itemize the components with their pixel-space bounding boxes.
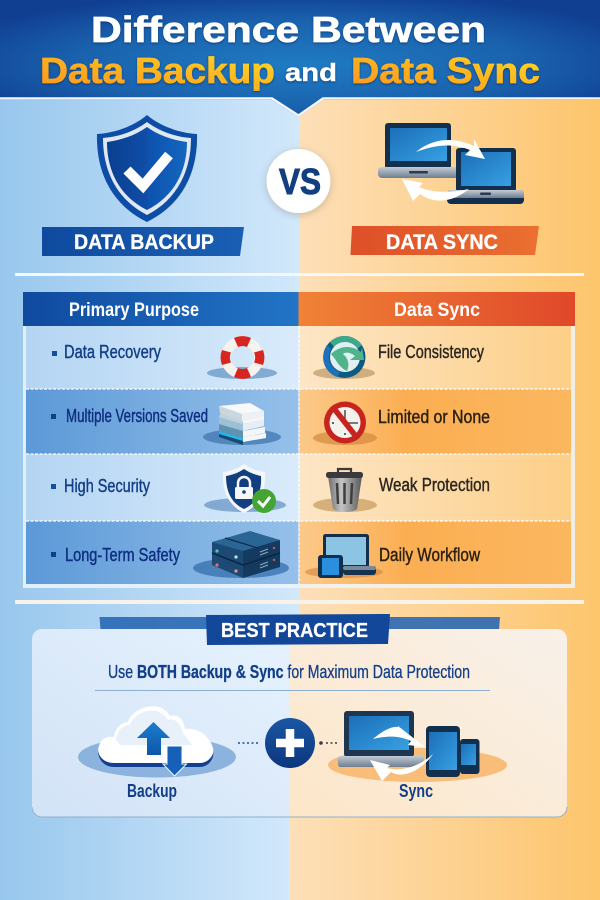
icon: two laptops syncing	[378, 123, 524, 204]
icon: shield lock with check	[204, 464, 286, 513]
row: Daily Workflow: Daily Workflow	[379, 545, 481, 565]
banner: Data Sync	[350, 226, 539, 255]
banner: Data Backup	[42, 227, 244, 256]
banner: Data Sync: DATA SYNC	[386, 231, 498, 254]
icon: shield with check	[97, 115, 197, 222]
comparison table	[23, 292, 575, 588]
icon: no-sign clock	[313, 402, 377, 445]
title: Difference Between	[91, 9, 486, 50]
left column rows	[26, 326, 298, 584]
badge: best practice	[206, 614, 390, 645]
icon: trash can	[313, 469, 377, 512]
right column rows	[299, 326, 571, 584]
label: Backup: Backup	[127, 781, 177, 801]
title: and	[285, 59, 337, 87]
row: Limited or None: Limited or None	[378, 407, 490, 427]
header band with notch	[0, 0, 600, 117]
icon: plus	[265, 718, 315, 768]
row: Long-Term Safety: Long-Term Safety	[65, 545, 180, 565]
header: Data Sync	[298, 292, 575, 326]
icon: server stack	[193, 531, 289, 578]
icon: laptop with tablet	[305, 534, 383, 578]
connector dots left	[238, 742, 259, 744]
header: Primary Purpose: Primary Purpose	[69, 300, 199, 321]
icon: sync globe	[313, 336, 375, 379]
title: Data Backup	[40, 50, 275, 91]
title: Data Sync	[351, 50, 540, 91]
ribbon behind best practice badge	[100, 617, 500, 630]
title	[40, 9, 540, 91]
icon: cloud with arrows	[78, 706, 236, 778]
badge: best practice: BEST PRACTICE	[221, 619, 368, 642]
icon: stacked versions	[203, 403, 281, 445]
label: Sync: Sync	[399, 781, 433, 801]
VS badge	[266, 149, 330, 213]
banner: Data Backup: DATA BACKUP	[74, 231, 214, 254]
icon: laptop and phones syncing	[328, 711, 507, 782]
row: High Security: High Security	[64, 476, 150, 496]
row: File Consistency: File Consistency	[378, 342, 484, 362]
VS badge: VS	[279, 161, 321, 202]
row: Multiple Versions Saved: Multiple Versions Saved	[66, 406, 208, 426]
panel: best practice	[32, 614, 567, 817]
row: Data Recovery: Data Recovery	[64, 342, 161, 362]
header: Primary Purpose	[23, 292, 298, 326]
recommendation text: Use BOTH Backup & Sync for Maximum Data Protection	[108, 662, 470, 682]
header: Data Sync: Data Sync	[394, 300, 480, 321]
row: Weak Protection: Weak Protection	[379, 475, 490, 495]
icon: lifebuoy	[207, 336, 277, 379]
connector dots right	[319, 741, 337, 745]
row: Multiple Versions Saved	[51, 406, 208, 426]
